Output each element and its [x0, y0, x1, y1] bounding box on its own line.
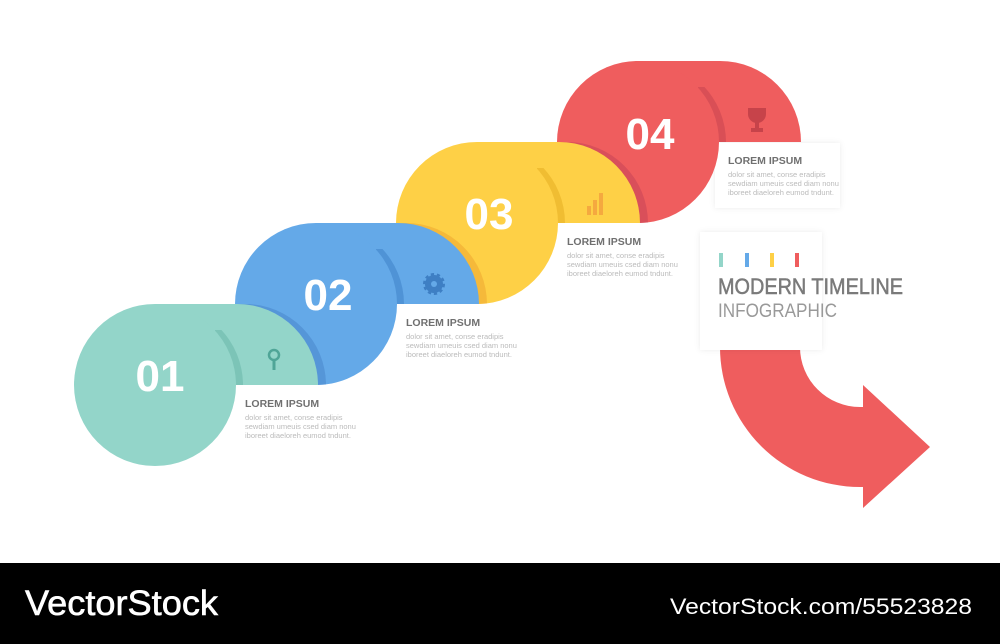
text block 03: LOREM IPSUM — [567, 236, 641, 248]
footer bar — [0, 563, 1000, 644]
text block 01: iboreet diaeloreh eumod tndunt. — [245, 431, 351, 440]
text block 04: LOREM IPSUM — [728, 155, 802, 167]
step 02: 02 — [304, 271, 352, 320]
text block 02: iboreet diaeloreh eumod tndunt. — [406, 350, 512, 359]
step 01 — [74, 304, 356, 466]
text block 04: iboreet diaeloreh eumod tndunt. — [728, 188, 834, 197]
icon: gear — [425, 275, 443, 293]
text block 04: sewdiam umeuis csed diam nonu — [728, 179, 839, 188]
panel: title box — [700, 232, 903, 350]
text block 03 — [567, 236, 678, 278]
text block 01 — [245, 398, 356, 440]
icon: bar chart — [587, 193, 603, 215]
color bars — [719, 253, 799, 267]
arrow: red curved arrow — [720, 347, 930, 508]
step 04: 04 — [626, 110, 675, 159]
text block 01: dolor sit amet, conse eradipis — [245, 413, 343, 422]
step 01: 01 — [136, 352, 184, 401]
step 04 — [557, 61, 840, 223]
text block 04 — [728, 155, 839, 197]
text block 01: LOREM IPSUM — [245, 398, 319, 410]
text block 01: sewdiam umeuis csed diam nonu — [245, 422, 356, 431]
subtitle: INFOGRAPHIC — [718, 301, 837, 322]
step 02 — [235, 223, 517, 385]
text block 02: sewdiam umeuis csed diam nonu — [406, 341, 517, 350]
text block 02: LOREM IPSUM — [406, 317, 480, 329]
step 03: 03 — [465, 190, 513, 239]
text block 04: dolor sit amet, conse eradipis — [728, 170, 826, 179]
icon: trophy — [748, 108, 766, 132]
footer id: VectorStock.com/55523828 — [670, 594, 972, 619]
text block 03: sewdiam umeuis csed diam nonu — [567, 260, 678, 269]
text block 03: dolor sit amet, conse eradipis — [567, 251, 665, 260]
step 03 — [396, 142, 678, 304]
text block 02 — [406, 317, 517, 359]
icon: magnifier — [269, 350, 279, 370]
text block 03: iboreet diaeloreh eumod tndunt. — [567, 269, 673, 278]
text block 02: dolor sit amet, conse eradipis — [406, 332, 504, 341]
title text: MODERN TIMELINE — [718, 274, 903, 299]
footer logo: VectorStock — [25, 584, 219, 623]
